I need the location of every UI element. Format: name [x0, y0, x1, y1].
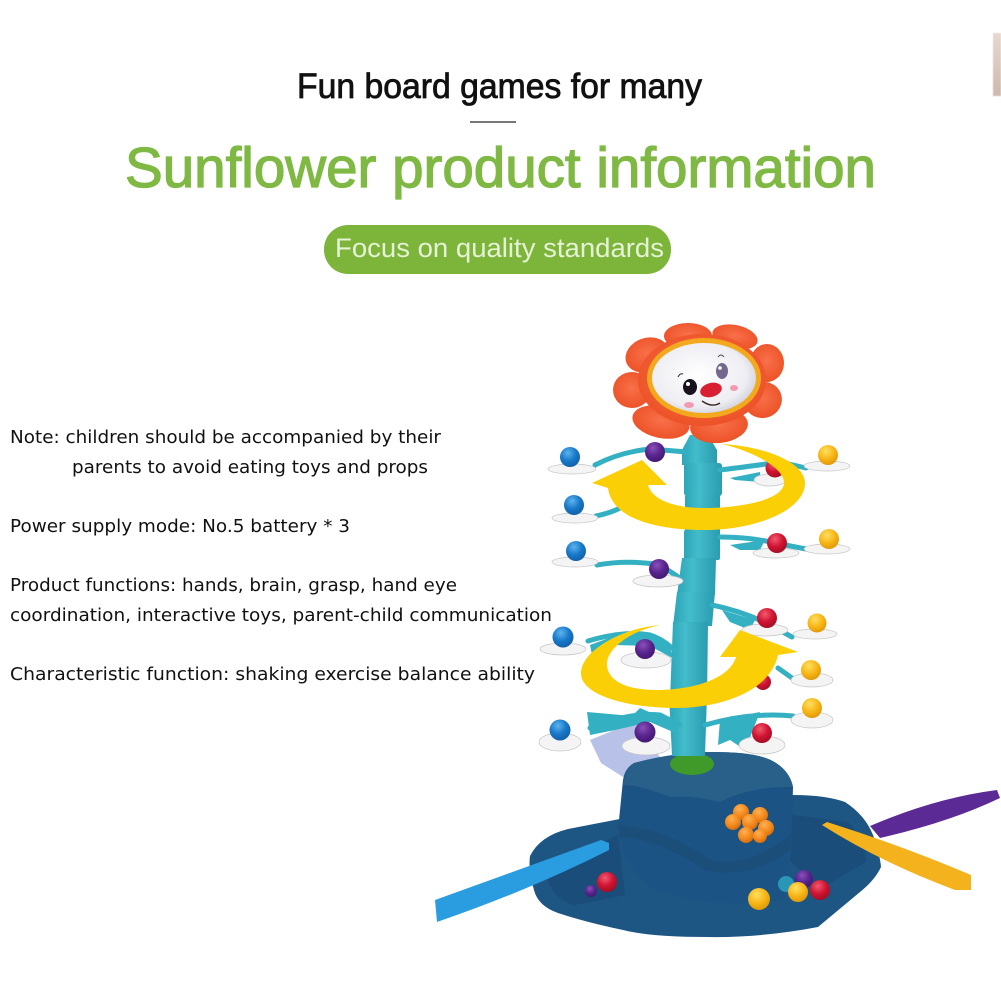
note text: parents to avoid eating toys and props [72, 457, 428, 478]
product functions text [10, 575, 552, 626]
flower pads [539, 461, 850, 755]
short divider under heading [470, 121, 516, 123]
pill text: Focus on quality standards [335, 233, 664, 263]
tray inner well [545, 815, 866, 905]
tray base [530, 795, 881, 937]
stem segments [669, 435, 722, 756]
cheeks [684, 385, 738, 408]
lavender wedge behind base [590, 722, 660, 777]
characteristic function text: Characteristic function: shaking exercise balance ability [10, 664, 535, 685]
title: sunflower product information: Sunflower product information [125, 136, 876, 200]
product illustration: sunflower toy [435, 320, 1000, 937]
tray balls [585, 870, 830, 910]
branches and leaves [587, 449, 806, 750]
branch strokes [588, 449, 806, 728]
green knob [670, 753, 714, 775]
pill badge [324, 225, 671, 274]
text block: product notes [10, 427, 552, 685]
purple tweezer [870, 790, 1000, 838]
power supply text: Power supply mode: No.5 battery * 3 [10, 516, 350, 537]
face [652, 343, 756, 413]
right eye [716, 355, 728, 379]
left eye [678, 374, 697, 395]
lower rotation arrow [581, 625, 798, 708]
orange ball cluster [725, 804, 774, 843]
blue tweezer [435, 840, 609, 922]
heading: fun board games: Fun board games for many [297, 67, 702, 106]
note text: Note: children should be accompanied by their [10, 427, 442, 448]
tower band shadow [619, 825, 790, 872]
mouth [702, 401, 720, 405]
product functions text: coordination, interactive toys, parent-child communication [10, 605, 552, 626]
decorative balls [550, 442, 839, 743]
flower head [613, 320, 787, 446]
petals [613, 320, 787, 446]
yellow tweezer [822, 822, 971, 890]
edge artifact top right [993, 33, 1001, 96]
face ring [647, 338, 761, 418]
nose [699, 380, 723, 400]
leaves [587, 472, 765, 750]
product functions text: Product functions: hands, brain, grasp, hand eye [10, 575, 457, 596]
tower top surface [623, 752, 793, 802]
note text [10, 427, 442, 478]
tower [618, 752, 793, 903]
top rotation arrow [592, 444, 805, 530]
